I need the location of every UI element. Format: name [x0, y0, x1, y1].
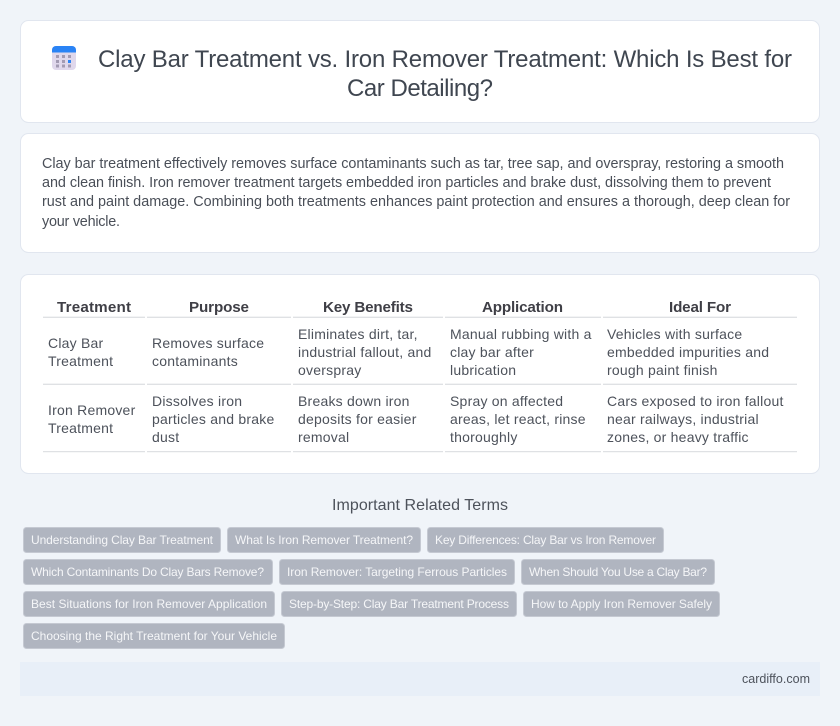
table row: iron remover treatment: Cars exposed to iron fallout: [607, 393, 784, 409]
tag: Choosing the Right Treatment for Your Vehicle: [31, 629, 277, 643]
footer bar: cardiffo.com: [742, 672, 810, 686]
tag: Key Differences: Clay Bar vs Iron Remover: [435, 533, 656, 547]
table row: clay bar treatment: contaminants: [152, 353, 238, 369]
tag: Understanding Clay Bar Treatment: [31, 533, 214, 547]
table row: iron remover treatment: areas, let react, rinse: [450, 411, 586, 427]
table row: iron remover treatment: near railways, industrial: [607, 411, 759, 427]
table row: iron remover treatment: Breaks down iron: [298, 393, 410, 409]
table header row: Purpose: [189, 299, 249, 316]
table header row: Ideal For: [669, 299, 731, 316]
table row: clay bar treatment: lubrication: [450, 362, 516, 378]
table row: clay bar treatment: Manual rubbing with a: [450, 326, 592, 342]
table row: clay bar treatment: embedded impurities and: [607, 344, 769, 360]
panel: summary: [20, 134, 820, 252]
tag: [24, 560, 272, 584]
text block: summary paragraph: your vehicle.: [42, 214, 120, 230]
panel: title header: [20, 20, 820, 122]
text block: summary paragraph: rust and paint damage. Combining both treatments enhances paint protection and ensures a thorough, deep clean for: [42, 194, 790, 210]
table header row: Treatment: [57, 299, 131, 316]
heading: important related terms: Important Related Terms: [332, 497, 508, 514]
table header row: [57, 299, 731, 316]
table row: iron remover treatment: removal: [298, 429, 349, 445]
tag: How to Apply Iron Remover Safely: [531, 597, 712, 611]
text block: summary paragraph: and clean finish. Iron remover treatment targets embedded iron particles and brake dust, dissolving them to prevent: [42, 175, 771, 191]
tag: [282, 592, 516, 616]
tag: Which Contaminants Do Clay Bars Remove?: [31, 565, 264, 579]
table row: iron remover treatment: deposits for easier: [298, 411, 417, 427]
tag: Step-by-Step: Clay Bar Treatment Process: [289, 597, 509, 611]
tag: [280, 560, 514, 584]
text block: summary paragraph: [42, 156, 790, 230]
tag: Best Situations for Iron Remover Application: [31, 597, 267, 611]
footer bar: [20, 662, 820, 696]
tag: [524, 592, 720, 616]
title: [98, 46, 792, 102]
table header row: Application: [482, 299, 563, 316]
tag: [24, 624, 284, 648]
table row: clay bar treatment: Treatment: [48, 353, 113, 369]
tag: [24, 592, 274, 616]
tag: When Should You Use a Clay Bar?: [529, 565, 707, 579]
panel: comparison table: [20, 274, 820, 474]
table row: clay bar treatment: overspray: [298, 362, 361, 378]
icon: calendar: [52, 46, 76, 70]
tag: What Is Iron Remover Treatment?: [235, 533, 413, 547]
tag: [522, 560, 714, 584]
tag: [24, 528, 220, 552]
table header row: Key Benefits: [323, 299, 413, 316]
text block: summary paragraph: Clay bar treatment effectively removes surface contaminants such as tar, tree sap, and overspray, restoring a smooth: [42, 156, 784, 172]
table row: iron remover treatment: particles and brake: [152, 411, 274, 427]
table row: iron remover treatment: Treatment: [48, 420, 113, 436]
table row: iron remover treatment: Spray on affected: [450, 393, 563, 409]
tag: [428, 528, 664, 552]
table row: clay bar treatment: Clay Bar: [48, 335, 104, 351]
table row: iron remover treatment: Dissolves iron: [152, 393, 242, 409]
tag: [228, 528, 420, 552]
table row: iron remover treatment: zones, or heavy traffic: [607, 429, 749, 445]
table row: clay bar treatment: rough paint finish: [607, 362, 718, 378]
table row: iron remover treatment: dust: [152, 429, 179, 445]
table row: clay bar treatment: [48, 326, 769, 378]
title: Car Detailing?: [347, 75, 493, 102]
related term tags: [24, 528, 720, 648]
table row: clay bar treatment: Eliminates dirt, tar,: [298, 326, 418, 342]
table row: clay bar treatment: Removes surface: [152, 335, 264, 351]
table row: clay bar treatment: Vehicles with surface: [607, 326, 742, 342]
table row: iron remover treatment: Iron Remover: [48, 402, 136, 418]
title: Clay Bar Treatment vs. Iron Remover Treatment: Which Is Best for: [98, 46, 792, 73]
table row: clay bar treatment: clay bar after: [450, 344, 534, 360]
table row: iron remover treatment: thoroughly: [450, 429, 518, 445]
tag: Iron Remover: Targeting Ferrous Particles: [287, 565, 507, 579]
table row: iron remover treatment: [48, 393, 784, 445]
table row: clay bar treatment: industrial fallout, and: [298, 344, 431, 360]
